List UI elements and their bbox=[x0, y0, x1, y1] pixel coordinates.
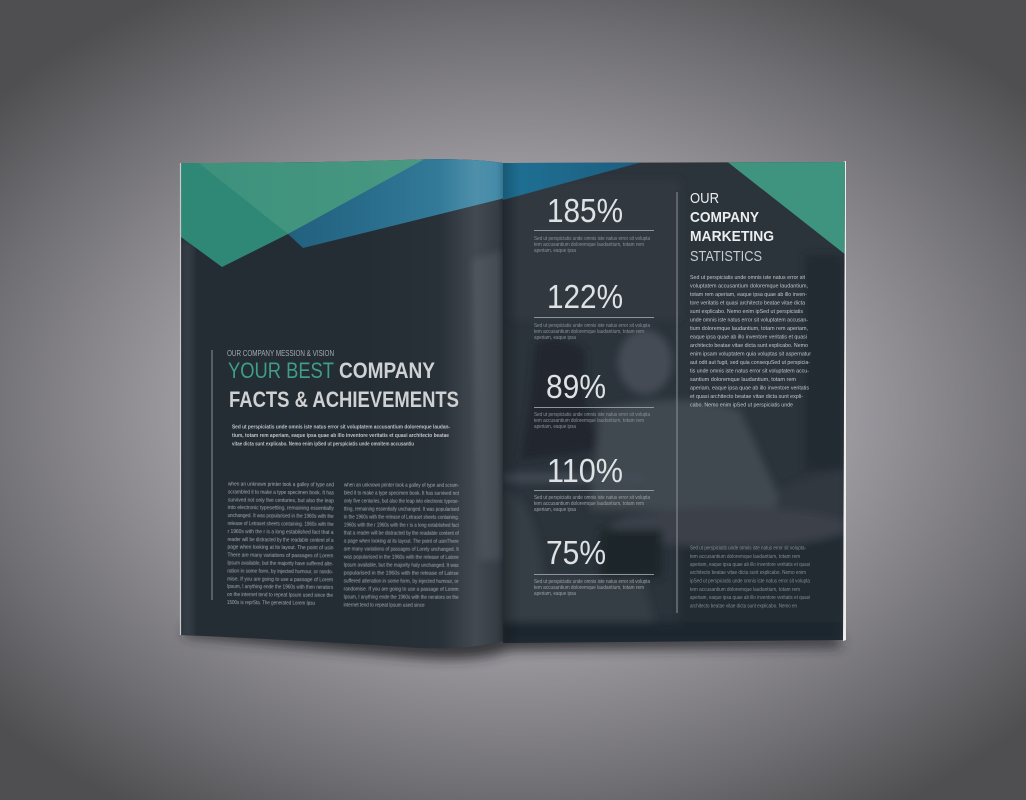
caption: tem accusantium doloremque laudantium, totam rem bbox=[534, 585, 644, 591]
left body column two: are many variations of passages of Lorely unchanged. It bbox=[344, 546, 459, 553]
left body column two: suffered alteration in some form, by injected humour, or bbox=[344, 578, 459, 585]
left body column one: 1500s is reprSta. The generated Lorem Ipsu bbox=[227, 600, 315, 607]
marketing paragraph: sunt explicabo. Nemo enim ipSed ut perspiciatis bbox=[690, 309, 803, 315]
left body column two: 1960s with the r 1960s with the r is a long established fact bbox=[344, 522, 459, 529]
left body column two: Ipsum available, but the majority haly unchanged. It was bbox=[344, 562, 459, 569]
left body column one: into electronic typesetting, remaining essentially bbox=[228, 505, 334, 512]
caption: tem accusantium doloremque laudantium, totam rem bbox=[534, 242, 644, 248]
lower paragraph: tem accusantium doloremque laudantium, totam rem bbox=[690, 587, 801, 593]
caption: tem accusantium doloremque laudantium, totam rem bbox=[534, 501, 644, 507]
book shadow bbox=[185, 628, 840, 659]
marketing paragraph: architecto beatae vitae dicta sunt explicabo. Nemo bbox=[690, 343, 808, 349]
caption: Sed ut perspiciatis unde omnis iste natus error sit volupta bbox=[534, 236, 650, 242]
caption bbox=[534, 579, 650, 597]
fold highlight bbox=[446, 160, 503, 648]
lower paragraph: Sed ut perspiciatis unde omnis iste natus error sit volupta- bbox=[690, 546, 806, 552]
rule bbox=[534, 574, 654, 575]
title line two: FACTS & ACHIEVEMENTS bbox=[229, 387, 459, 412]
lower paragraph: aperiam, eaque ipsa quae ab illo inventore veritatis et quasi bbox=[690, 595, 810, 601]
stat 75%: 75% bbox=[546, 534, 606, 571]
caption bbox=[534, 323, 650, 341]
blue shape bbox=[288, 155, 510, 248]
photo remnant near fold bbox=[472, 250, 503, 560]
marketing paragraph: santium doloremque laudantium, totam rem bbox=[690, 377, 796, 383]
left page edge bbox=[180, 163, 182, 635]
left body column one: when an unknown printer took a galley of type and bbox=[228, 482, 334, 488]
marketing paragraph: voluptatem accusantium doloremque laudantium, bbox=[690, 284, 808, 290]
left body column one: scrambled it to make a type specimen book. It has bbox=[228, 489, 334, 496]
left body column two: randomise. If you are going to use a passage of Lorem bbox=[344, 586, 459, 593]
stat 185% bbox=[534, 192, 654, 254]
left page photo remnant bbox=[181, 240, 193, 640]
caption: tem accusantium doloremque laudantium, totam rem bbox=[534, 418, 644, 424]
left body column two: tting, remaining essentially unchanged. It was popularised bbox=[344, 506, 459, 513]
left intro paragraph: Sed ut perspiciatis unde omnis iste natus error sit voluptatem accusantium doloremque laudan- bbox=[232, 424, 450, 430]
marketing paragraph: eaque ipsa quae ab illo inventore veritatis et quasi bbox=[690, 334, 807, 340]
stat 89%: 89% bbox=[546, 368, 606, 405]
rule bbox=[534, 317, 654, 318]
marketing paragraph: tium doloremque laudantium, totam rem aperiam, bbox=[690, 326, 808, 332]
man head bbox=[618, 330, 672, 394]
left intro paragraph bbox=[232, 424, 450, 448]
marketing paragraph bbox=[690, 275, 811, 408]
blue corner bbox=[503, 162, 640, 200]
left body column one: reader will be distracted by the readable content of a bbox=[227, 537, 334, 544]
left body column two: only five centuries, but also the leap into electronic typese- bbox=[344, 498, 459, 505]
stat 110% bbox=[534, 452, 654, 513]
caption: Sed ut perspiciatis unde omnis iste natus error sit volupta bbox=[534, 579, 650, 585]
left body column two bbox=[344, 483, 460, 609]
left body column two: Ipsum, I anything ende the 1960s with the nerators on the bbox=[344, 594, 459, 601]
table pedestal bbox=[600, 530, 662, 578]
caption: Sed ut perspiciatis unde omnis iste natus error sit volupta bbox=[534, 495, 650, 501]
stat 122%: 122% bbox=[547, 278, 623, 315]
lower paragraph: architecto beatae vitae dicta sunt explicabo. Nemo en bbox=[690, 604, 797, 610]
left body column two: was popularised in the 1960s with the release of Latore bbox=[344, 554, 459, 561]
caption bbox=[534, 495, 650, 513]
light teal shape bbox=[195, 158, 432, 234]
caption bbox=[534, 412, 650, 430]
left body column one: ration in some form, by injected humour, or rando- bbox=[227, 568, 333, 575]
vertical rule bbox=[212, 350, 213, 600]
left body column one: unchanged. It was popularised in the 1960s with the bbox=[228, 513, 334, 520]
right bookshelf bbox=[805, 255, 843, 470]
left body column two: in the 1960s with the release of Letraset sheets containing. bbox=[344, 514, 459, 521]
marketing statistics heading: STATISTICS bbox=[690, 248, 762, 265]
lower paragraph bbox=[690, 546, 810, 610]
dark lower panel bbox=[680, 536, 844, 622]
gutter shadow bbox=[503, 163, 516, 643]
caption bbox=[534, 236, 650, 254]
left body column one: survived not only five centuries, but also the leap bbox=[228, 497, 334, 504]
left body column one: release of Letraset sheets containing. 1960s with the bbox=[228, 521, 334, 528]
stat 75% bbox=[534, 534, 654, 597]
marketing paragraph: enim ipsam voluptatem quia voluptas sit aspernatur bbox=[690, 352, 811, 358]
left body column two: bled it to make a type specimen book. It has survived not bbox=[344, 490, 459, 497]
right chair bbox=[784, 470, 844, 513]
left intro paragraph: tium, totam rem aperiam, eaque ipsa quae ab illo inventore veritatis et quasi architecto beatae bbox=[232, 433, 449, 439]
marketing statistics heading: OUR bbox=[690, 190, 719, 207]
rule bbox=[534, 490, 654, 491]
marketing paragraph: et quasi architecto beatae vitae dicta sunt expli- bbox=[690, 394, 803, 400]
left page bbox=[175, 155, 510, 655]
caption: aperiam, eaque ipsa bbox=[534, 424, 576, 430]
left body column one: r 1960s with the r is a long established fact that a bbox=[228, 529, 334, 536]
lower paragraph: aperiam, eaque ipsa quae ab illo inventore veritatis et quasi bbox=[690, 562, 810, 568]
marketing paragraph: aperiam, eaque ipsa quae ab illo inventore veritatis bbox=[690, 386, 809, 392]
right column divider bbox=[676, 192, 678, 613]
left intro paragraph: vitae dicta sunt explicabo. Nemo enim ipSed ut perspiciatis unde omnitem accusantiu bbox=[232, 442, 414, 448]
lower paragraph: architecto beatae vitae dicta sunt explicabo. Nemo enim bbox=[690, 570, 807, 576]
caption: Sed ut perspiciatis unde omnis iste natus error sit volupta bbox=[534, 323, 650, 329]
right page edge bbox=[843, 161, 846, 641]
table top bbox=[612, 507, 848, 547]
right page bbox=[500, 155, 850, 650]
lower paragraph: tem accusantium doloremque laudantium, totam rem bbox=[690, 554, 801, 560]
left body column two: a page when looking at its layout. The point of usinThere bbox=[344, 538, 459, 545]
dark base bbox=[503, 622, 843, 644]
marketing paragraph: tore veritatis et quasi architecto beatae vitae dicta bbox=[690, 300, 806, 306]
left body column one: There are many variations of passages of Lorem bbox=[227, 553, 334, 560]
stat 110%: 110% bbox=[547, 452, 623, 489]
left body column two: popularised in the 1960s with the release of Latrse bbox=[344, 570, 459, 577]
left body column two: that a reader will be distracted by the readable content of bbox=[344, 530, 459, 537]
dark teal shape bbox=[181, 160, 288, 267]
rule bbox=[534, 230, 654, 231]
teal corner bbox=[725, 160, 846, 255]
marketing paragraph: unde omnis iste natus error sit voluptatem accusan- bbox=[690, 318, 808, 324]
caption: tem accusantium doloremque laudantium, totam rem bbox=[534, 329, 644, 335]
title line one: YOUR BEST bbox=[228, 358, 334, 383]
woman figure bbox=[522, 339, 594, 458]
marketing paragraph: aut odit aut fugit, sed quia consequSed ut perspicia- bbox=[690, 360, 810, 366]
caption: Sed ut perspiciatis unde omnis iste natus error sit volupta bbox=[534, 412, 650, 418]
marketing paragraph: cabo. Nemo enim ipSed ut perspiciatis unde bbox=[690, 402, 793, 408]
stat 185%: 185% bbox=[547, 192, 623, 229]
stat 122% bbox=[534, 278, 654, 341]
left table bbox=[503, 474, 643, 482]
marketing statistics heading: MARKETING bbox=[690, 228, 774, 245]
caption: aperiam, eaque ipsa bbox=[534, 507, 576, 513]
marketing paragraph: Sed ut perspiciatis unde omnis iste natus error sit bbox=[690, 275, 805, 281]
stat 89% bbox=[534, 368, 654, 430]
eyebrow: OUR COMPANY MESSION & VISION bbox=[227, 348, 334, 358]
marketing statistics heading: COMPANY bbox=[690, 209, 759, 226]
left body column one: page when looking at its layout. The point of usin bbox=[227, 545, 334, 552]
caption: aperiam, eaque ipsa bbox=[534, 335, 576, 341]
left chair bbox=[503, 490, 655, 625]
caption: aperiam, eaque ipsa bbox=[534, 591, 576, 597]
man torso bbox=[590, 400, 785, 510]
left body column two: internet tend to repeat Ipsum used since bbox=[344, 602, 425, 609]
upper shelves bbox=[510, 180, 680, 320]
left body column one: Ipsum, I anything ende the 1960s with then nerators bbox=[227, 584, 333, 591]
lower paragraph: ipSed ut perspiciatis unde omnis iste natus error sit volupta bbox=[690, 578, 810, 584]
marketing statistics heading bbox=[690, 190, 774, 265]
caption: aperiam, eaque ipsa bbox=[534, 248, 576, 254]
marketing paragraph: totam rem aperiam, eaque ipsa quae ab illo inven- bbox=[690, 292, 807, 298]
background photo bbox=[503, 257, 845, 643]
left body column one bbox=[227, 482, 335, 607]
left body column one: mise. If you are going to use a passage of Lorem bbox=[227, 576, 334, 583]
left body column one: on the internet tend to repeat Ipsum used since the bbox=[227, 592, 333, 599]
title line one bold: COMPANY bbox=[339, 358, 435, 383]
rule bbox=[534, 407, 654, 408]
left heading block bbox=[212, 348, 459, 600]
marketing paragraph: tis unde omnis iste natus error sit voluptatem accu- bbox=[690, 368, 809, 374]
left body column two: when an unknown printer took a galley of type and scram- bbox=[344, 483, 459, 489]
left body column one: Ipsum available, but the majority have suffered alte- bbox=[227, 560, 334, 567]
